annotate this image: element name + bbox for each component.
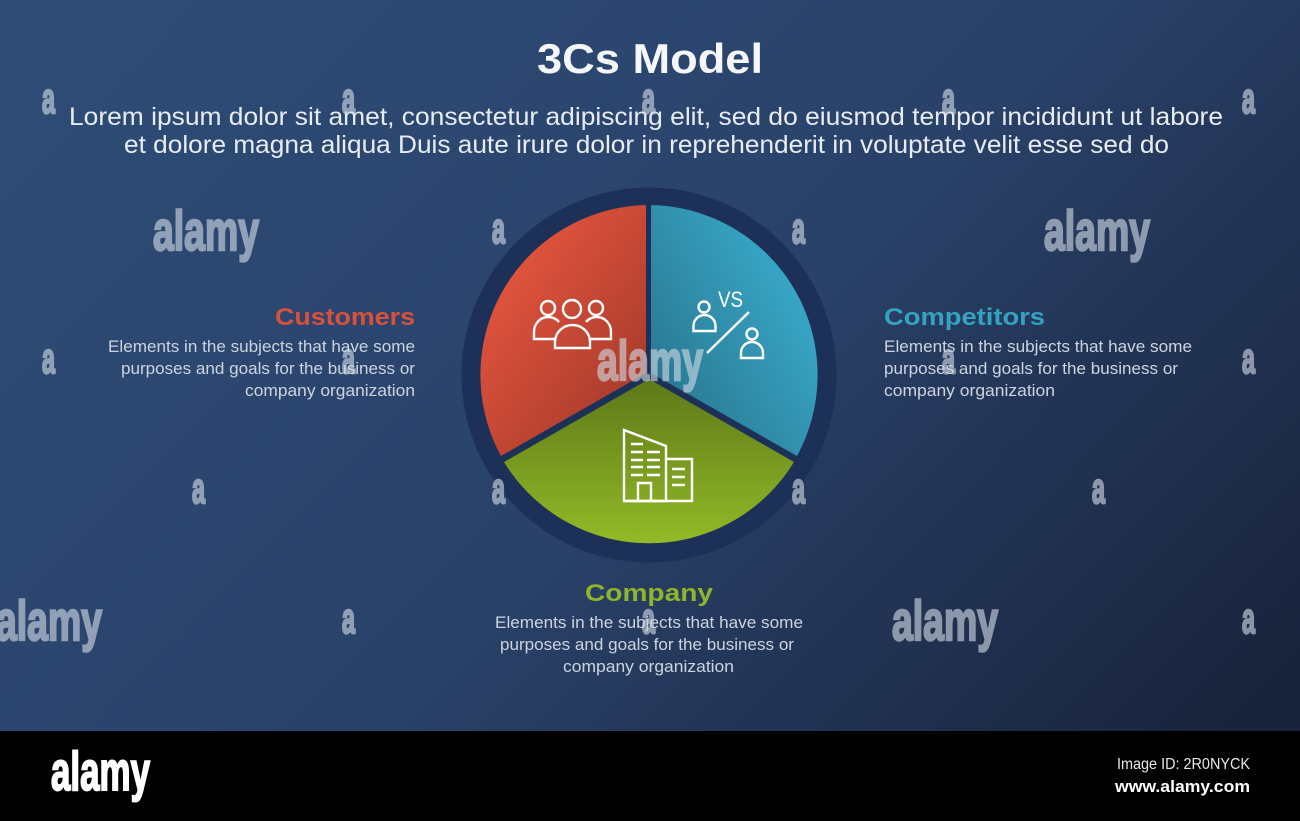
watermarks: alamy bbox=[153, 199, 259, 262]
intro text: Lorem ipsum dolor sit amet, consectetur adipiscing elit, sed do eiusmod tempor incididunt ut labore bbox=[69, 103, 1223, 131]
watermarks: a bbox=[342, 335, 356, 383]
website: www.alamy.com bbox=[1114, 777, 1250, 796]
text: customers description bbox=[108, 337, 415, 400]
watermarks: a bbox=[492, 205, 506, 253]
block: competitors bbox=[884, 304, 1192, 400]
text: company description: Elements in the subjects that have some bbox=[495, 613, 803, 632]
watermarks: a bbox=[342, 75, 356, 123]
watermarks: a bbox=[642, 595, 656, 643]
watermarks: a bbox=[942, 335, 956, 383]
heading: company: Company bbox=[585, 580, 714, 607]
watermarks: a bbox=[42, 75, 56, 123]
watermarks: a bbox=[1242, 595, 1256, 643]
icon: customers group bbox=[534, 300, 611, 348]
footer logo: alamy bbox=[51, 740, 150, 802]
icon: company building bbox=[624, 430, 692, 501]
watermarks bbox=[0, 75, 1256, 652]
pie outer ring bbox=[462, 188, 836, 562]
watermarks: a bbox=[942, 75, 956, 123]
image id: Image ID: 2R0NYCK bbox=[1117, 756, 1250, 773]
text: customers description: purposes and goals for the business or bbox=[121, 359, 415, 378]
heading: competitors: Competitors bbox=[884, 304, 1045, 331]
icon: versus bbox=[694, 287, 763, 358]
icon: versus: VS bbox=[718, 287, 743, 312]
watermarks: a bbox=[342, 595, 356, 643]
segment: customers bbox=[480, 205, 646, 456]
watermarks: alamy bbox=[1044, 199, 1150, 262]
text: company description bbox=[495, 613, 803, 676]
watermarks: alamy bbox=[892, 589, 998, 652]
block: customers bbox=[108, 304, 415, 400]
footer bar bbox=[0, 731, 1300, 821]
watermarks: a bbox=[1242, 75, 1256, 123]
text: customers description: Elements in the subjects that have some bbox=[108, 337, 415, 356]
watermarks: alamy bbox=[597, 329, 703, 392]
watermarks: alamy bbox=[0, 589, 102, 652]
watermarks: a bbox=[1092, 465, 1106, 513]
watermarks: a bbox=[492, 465, 506, 513]
pie chart bbox=[462, 188, 836, 562]
text: competitors description bbox=[884, 337, 1192, 400]
watermarks: a bbox=[792, 205, 806, 253]
text: competitors description: Elements in the subjects that have some bbox=[884, 337, 1192, 356]
text: company description: purposes and goals for the business or bbox=[500, 635, 794, 654]
watermarks: a bbox=[642, 75, 656, 123]
heading: customers: Customers bbox=[275, 304, 415, 331]
text: competitors description: purposes and goals for the business or bbox=[884, 359, 1178, 378]
intro text bbox=[69, 103, 1223, 159]
watermarks: a bbox=[42, 335, 56, 383]
intro text: et dolore magna aliqua Duis aute irure dolor in reprehenderit in voluptate velit esse sed do bbox=[124, 131, 1169, 159]
text: customers description: company organization bbox=[245, 381, 415, 400]
segment: company bbox=[504, 379, 794, 543]
text: competitors description: company organization bbox=[884, 381, 1055, 400]
text: company description: company organization bbox=[563, 657, 734, 676]
watermarks: a bbox=[792, 465, 806, 513]
title: 3Cs Model bbox=[537, 35, 763, 82]
watermarks: a bbox=[1242, 335, 1256, 383]
segment: competitors bbox=[651, 205, 818, 456]
watermarks: a bbox=[192, 465, 206, 513]
block: company bbox=[495, 580, 803, 676]
